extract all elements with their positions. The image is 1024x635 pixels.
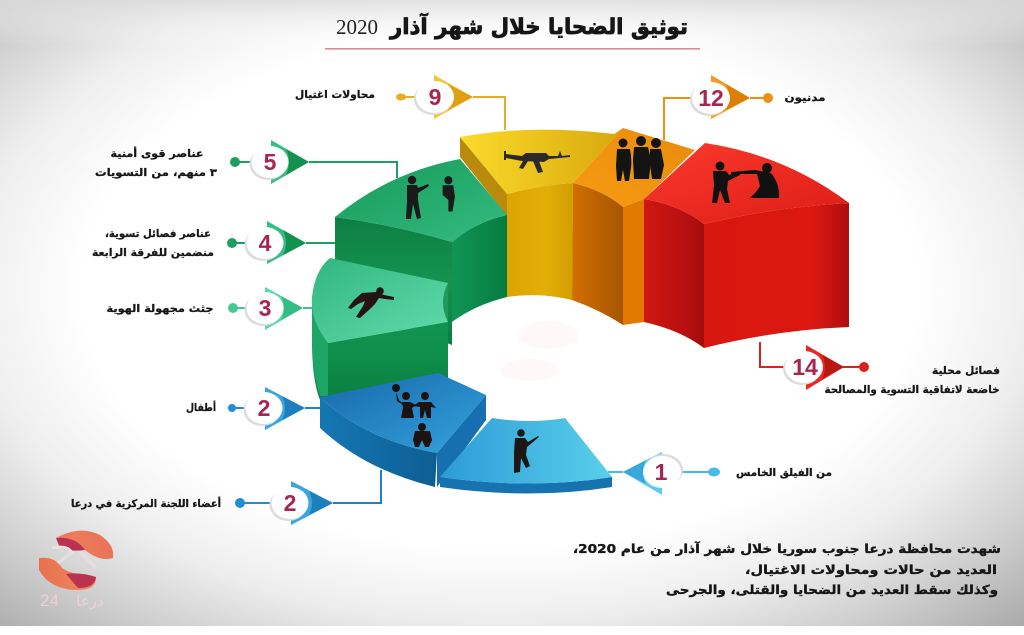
summary paragraph <box>573 541 1001 597</box>
label: settlement factions <box>92 228 214 259</box>
summary paragraph: شهدت محافظة درعا جنوب سوريا خلال شهر آذار من عام 2020، <box>573 541 1001 557</box>
callout: 2 children <box>228 387 305 430</box>
segment: green, security forces and settlement factions <box>335 159 507 345</box>
segment: yellow, assassination attempts <box>460 128 623 300</box>
title: توثيق الضحايا خلال شهر آذار <box>389 12 688 40</box>
summary paragraph: العديد من حالات ومحاولات الاغتيال، <box>745 562 997 577</box>
label: settlement factions: منضمين للفرقة الرابعة <box>92 247 214 259</box>
callout: 3 unidentified bodies <box>228 287 303 330</box>
title: 2020 <box>336 15 378 39</box>
watermark <box>500 321 578 381</box>
callout: 2 central committee: 2 <box>284 490 296 516</box>
label: civilians: مدنيون <box>784 92 826 104</box>
label: settlement factions: عناصر فصائل تسوية، <box>105 228 211 240</box>
callout: 14 local factions <box>783 345 869 390</box>
icon: assault rifle <box>504 151 570 173</box>
callout: 14 local factions: 14 <box>792 354 818 380</box>
label: assassination attempts: محاولات اغتيال <box>295 89 375 101</box>
callout: 5 security forces <box>230 140 309 184</box>
callout: 1 Fifth Corps: 1 <box>655 459 668 485</box>
label: Fifth Corps: من الفيلق الخامس <box>736 467 832 479</box>
label: children: أطفال <box>186 400 216 414</box>
callout: 2 central committee <box>235 481 333 525</box>
segment: light blue, Fifth Corps <box>440 418 612 494</box>
segment: orange, civilians <box>572 128 695 325</box>
3D ring chart <box>312 128 849 494</box>
icon: two armed men <box>406 176 455 219</box>
callout: 9 assassination attempts: 9 <box>429 84 441 110</box>
label: local factions: خاضعة لاتفاقية التسوية والمصالحة <box>824 384 1000 396</box>
icon: children and adult <box>392 384 436 447</box>
title underline <box>325 48 700 50</box>
callout: 9 assassination attempts <box>396 75 473 119</box>
icon: running figure <box>348 287 394 318</box>
icon: soldiers in combat <box>712 162 779 203</box>
callout: 3 unidentified bodies: 3 <box>259 295 271 321</box>
logo: 24 <box>40 591 59 610</box>
segment: dark blue, children and central committee <box>320 373 486 487</box>
label: security forces: عناصر قوى أمنية <box>110 146 204 160</box>
label: security forces <box>95 146 218 179</box>
callout: 4 settlement factions: 4 <box>259 230 272 256</box>
label: security forces: ٣ منهم، من التسويات <box>95 167 218 179</box>
summary paragraph: وكذلك سقط العديد من الضحايا والقتلى، والجرحى <box>666 582 998 597</box>
label: unidentified bodies: جثث مجهولة الهوية <box>106 303 214 315</box>
logo <box>39 531 113 610</box>
label: local factions <box>824 365 1000 396</box>
segment: light green, unidentified bodies <box>312 258 448 400</box>
connector lines <box>303 97 787 503</box>
callout: 1 Fifth Corps <box>623 452 720 495</box>
callout: 4 settlement factions <box>227 221 306 264</box>
callout: 5 security forces: 5 <box>264 149 277 175</box>
icon: civilians group <box>616 136 664 181</box>
callout: 12 civilians: 12 <box>698 85 724 111</box>
label: local factions: فصائل محلية <box>932 365 1000 377</box>
label: central committee members: أعضاء اللجنة المركزية في درعا <box>71 496 221 510</box>
callout: 12 civilians <box>690 75 773 119</box>
logo: درعا <box>76 592 104 610</box>
icon: armed fighter <box>514 429 539 473</box>
segment: red, local factions <box>644 143 849 348</box>
callout: 2 children: 2 <box>258 395 270 421</box>
